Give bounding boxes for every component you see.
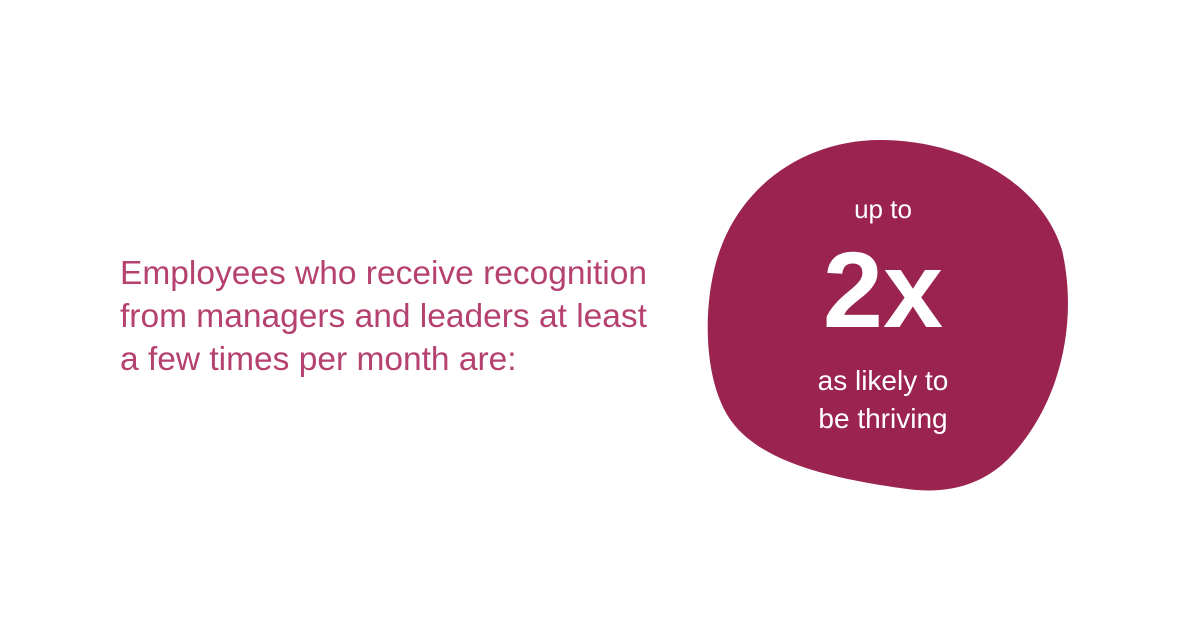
text block: lead statement — [120, 255, 647, 378]
stat: 2x: 2x — [823, 229, 943, 350]
text block: lead statement: a few times per month are: — [120, 341, 517, 378]
label: up to: up to — [854, 194, 912, 224]
text block: lead statement: Employees who receive recognition — [120, 255, 647, 292]
blob shape — [708, 140, 1068, 490]
label: as likely to be thriving: as likely to — [818, 365, 948, 396]
label: as likely to be thriving: be thriving — [818, 403, 948, 434]
text block: lead statement: from managers and leaders at least — [120, 298, 647, 335]
